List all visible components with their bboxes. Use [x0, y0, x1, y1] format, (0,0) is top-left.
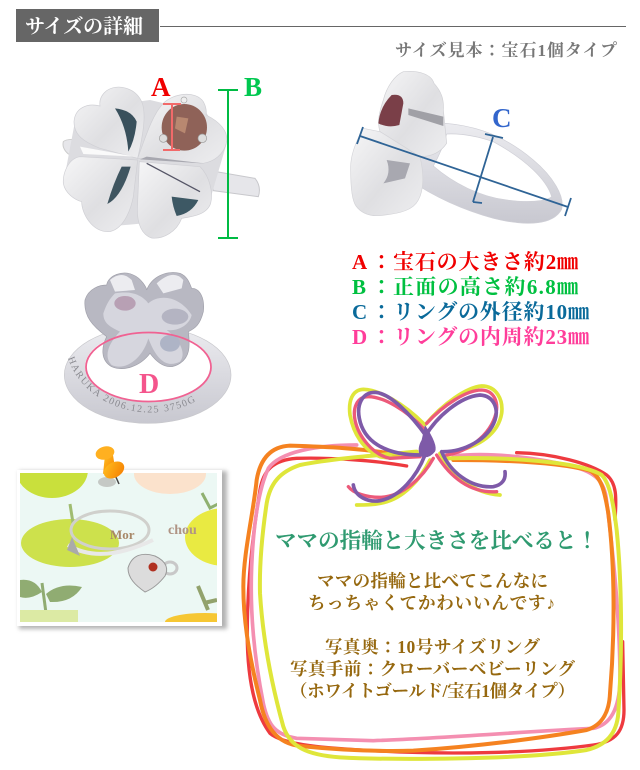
- legend row B: ：: [371, 275, 392, 299]
- icon: push pin: [94, 444, 127, 487]
- ribbon frame panel: [243, 386, 624, 759]
- ribbon frame strands: [243, 386, 624, 759]
- photo frame: [17, 470, 222, 626]
- legend row D: リングの内周約23㎜: [393, 325, 590, 349]
- label D: D: [139, 369, 159, 400]
- panel heading: ママの指輪と大きさを比べると！: [275, 529, 598, 553]
- legend row A: 宝石の大きさ約2㎜: [393, 250, 579, 274]
- legend row C: リングの外径約10㎜: [393, 300, 590, 324]
- bow loops: [350, 386, 502, 505]
- legend row B: B: [352, 275, 366, 299]
- legend row C: ：: [371, 300, 392, 324]
- ring side view with dimension C: [351, 71, 571, 223]
- heading: size details: [16, 9, 159, 42]
- dimension lines C: [357, 127, 571, 216]
- photo: ring comparison: [16, 468, 230, 632]
- dimension legend: [352, 250, 590, 349]
- ring front view with dimensions A and B: [63, 72, 262, 238]
- panel text block: （ホワイトゴールド/宝石1個タイプ）: [290, 681, 575, 701]
- legend row A: ：: [371, 250, 392, 274]
- pink inner circumference ellipse: [86, 332, 211, 402]
- legend row C: C: [352, 300, 367, 324]
- photo scene: [20, 473, 217, 622]
- ring back view with dimension D: [64, 272, 232, 424]
- dimension bar A: [163, 104, 181, 150]
- label C: C: [492, 103, 512, 133]
- panel text block: [290, 571, 576, 701]
- legend row A: A: [352, 250, 368, 274]
- label B: B: [244, 72, 262, 102]
- panel text block: 写真奥：10号サイズリング: [325, 637, 540, 657]
- legend row B: 正面の高さ約6.8㎜: [393, 275, 579, 299]
- legend row D: ：: [371, 325, 392, 349]
- dimension bar B: [218, 90, 238, 238]
- heading: size details: サイズの詳細: [25, 15, 143, 38]
- photo scene: chou: [168, 523, 197, 538]
- ring front photo: [63, 87, 259, 238]
- ring back photo: [64, 272, 231, 423]
- photo scene: Mor: [110, 527, 135, 542]
- label A: A: [151, 72, 171, 102]
- panel text block: 写真手前：クローバーベビーリング: [290, 659, 576, 679]
- ring side photo: [351, 71, 562, 223]
- legend row D: D: [352, 325, 367, 349]
- panel text block: ママの指輪と比べてこんなに: [317, 571, 548, 591]
- photo frame shadow: [19, 471, 227, 629]
- subtitle: sample type: サイズ見本：宝石1個タイプ: [395, 40, 617, 60]
- engraved text: HARUKA 2006.12.25 3750G: [68, 356, 195, 412]
- panel text block: ちっちゃくてかわいいんです♪: [308, 593, 555, 613]
